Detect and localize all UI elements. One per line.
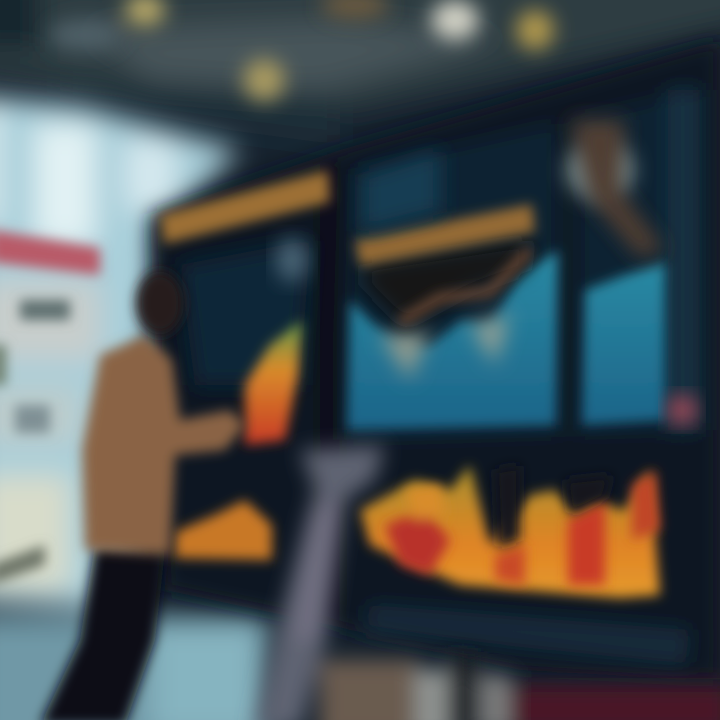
gray chart mark [276, 238, 308, 282]
display wall: dark navy frame [150, 40, 720, 680]
lower fire bar chart [360, 465, 660, 598]
right gray circle [566, 140, 634, 200]
lower orange chart [175, 500, 272, 560]
left screen chart [160, 170, 330, 560]
ceiling lights [49, 0, 554, 101]
heat chart [245, 320, 302, 445]
main header: orange bar [355, 204, 535, 266]
upper blue box [362, 150, 440, 232]
torso [82, 335, 245, 555]
head [136, 271, 184, 335]
dark gaps between bars [495, 465, 612, 548]
right red dot [667, 395, 697, 425]
right orange arrow [570, 120, 665, 258]
left screen header: orange bar [160, 170, 330, 244]
pale highlights in chart [380, 315, 510, 380]
window: bright left side [0, 95, 270, 720]
foreground stand and floor [255, 445, 720, 720]
person [40, 271, 245, 720]
red bars [385, 470, 660, 585]
stand [255, 445, 385, 720]
floor strip [320, 660, 420, 720]
dark peaks over chart [365, 240, 530, 325]
window details [0, 230, 100, 585]
legs [40, 545, 165, 720]
left screen blue panel [180, 240, 310, 385]
orange trend line [400, 250, 530, 322]
right bar chart [566, 120, 697, 425]
main blue bar chart [347, 150, 558, 430]
